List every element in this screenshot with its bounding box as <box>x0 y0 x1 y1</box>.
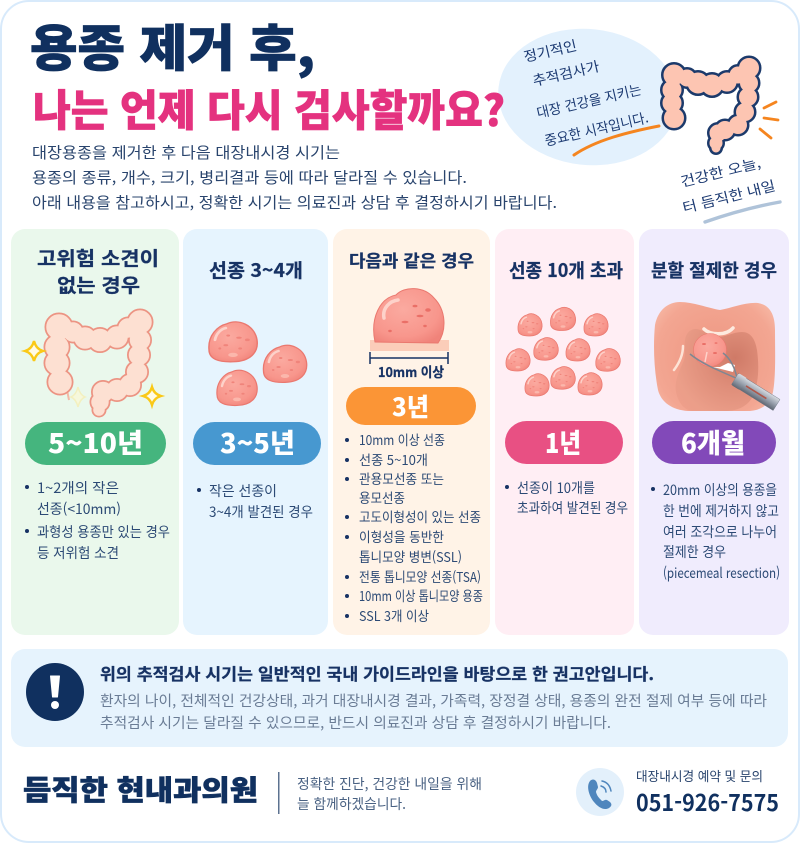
contact <box>636 766 779 818</box>
list: high risk features: 전통 톱니모양 선종(TSA) <box>359 566 481 586</box>
heading: piecemeal resection: 분할 절제한 경우 <box>651 257 777 283</box>
panel: more than 10 adenomas <box>495 229 634 635</box>
list: 3-4 adenomas: 작은 선종이 <box>209 481 277 501</box>
list: high risk features: 톱니모양 병변(SSL) <box>359 546 462 566</box>
clinic slogan: 늘 함께하겠습니다. <box>297 794 406 814</box>
list: high risk features: 10mm 이상 선종 <box>359 429 445 449</box>
list: low risk <box>25 478 170 563</box>
callout bubble: 중요한 시작입니다. <box>543 108 650 151</box>
icon: ten polyps <box>506 307 620 396</box>
list: 3-4 adenomas: 3~4개 발견된 경우 <box>209 502 313 522</box>
notice text: 환자의 나이, 전체적인 건강상태, 과거 대장내시경 결과, 가족력, 장정결 상태, 용종의 완전 절제 여부 등에 따라 <box>100 690 767 711</box>
clinic slogan: 정확한 진단, 건강한 내일을 위해 <box>297 774 482 794</box>
callout bubble: 추적검사가 <box>531 56 601 91</box>
list: piecemeal resection: 절제한 경우 <box>663 542 726 562</box>
handwritten note: 건강한 오늘, <box>678 153 763 192</box>
heading: low risk: 고위험 소견이 <box>37 244 159 271</box>
contact: 대장내시경 예약 및 문의 <box>636 766 763 785</box>
list: low risk: 1~2개의 작은 <box>37 478 119 498</box>
list: low risk: 등 저위험 소견 <box>37 543 119 563</box>
title <box>30 9 505 139</box>
list: high risk features: 고도이형성이 있는 선종 <box>359 506 481 526</box>
callout bubble: 대장 건강을 지키는 <box>535 79 643 123</box>
callout bubble: 정기적인 <box>522 35 579 67</box>
handwritten note: 터 듬직한 내일 <box>680 175 777 218</box>
contact: 051-926-7575 <box>636 784 779 818</box>
icon: large polyp with ruler <box>370 289 449 381</box>
notice text: 추적검사 시기는 달라질 수 있으므로, 반드시 의료진과 상담 후 결정하시기 바랍니다. <box>100 712 611 733</box>
list: high risk features: 선종 5~10개 <box>359 449 428 469</box>
intro text: 아래 내용을 참고하시고, 정확한 시기는 의료진과 상담 후 결정하시기 바랍니다. <box>32 191 557 213</box>
icon: endoscopic snare <box>654 302 780 411</box>
pill: 6 months <box>652 421 776 464</box>
panel: low risk <box>11 229 179 635</box>
notice text <box>100 690 767 733</box>
icon: colon header <box>663 58 778 152</box>
title: 용종 제거 후, <box>30 9 315 81</box>
pill: 5-10 years <box>25 422 166 465</box>
callout bubble <box>491 20 685 174</box>
heading: more than 10 adenomas: 선종 10개 초과 <box>509 256 623 283</box>
icon: phone <box>576 768 624 816</box>
intro text: 대장용종을 제거한 후 다음 대장내시경 시기는 <box>32 141 340 163</box>
pill: 3 years: 3년 <box>392 388 429 424</box>
list: piecemeal resection: 한 번에 제거하지 않고 <box>663 501 779 521</box>
panel: piecemeal resection <box>639 229 789 635</box>
list: more than 10 adenomas <box>505 478 628 518</box>
pill: 6 months: 6개월 <box>681 422 745 461</box>
list: high risk features: 관용모선종 또는 <box>359 468 444 488</box>
panel: high risk features <box>333 229 490 635</box>
intro text <box>32 141 557 213</box>
pill: 1 year: 1년 <box>545 422 581 461</box>
clinic slogan <box>278 772 482 814</box>
list: 3-4 adenomas <box>197 481 313 522</box>
icon: large polyp with ruler: 10mm 이상 <box>378 361 445 381</box>
heading: 3-4 adenomas: 선종 3~4개 <box>209 256 303 283</box>
list: low risk: 과형성 용종만 있는 경우 <box>37 522 170 542</box>
heading: low risk: 없는 경우 <box>57 271 140 298</box>
list: more than 10 adenomas: 초과하여 발견된 경우 <box>517 498 628 518</box>
list: high risk features <box>345 429 483 625</box>
pill: 1 year <box>505 421 623 464</box>
icon: colon <box>46 311 151 415</box>
clinic name: 듬직한 현내과의원 <box>23 769 258 809</box>
list: high risk features: 이형성을 동반한 <box>359 526 444 546</box>
list: piecemeal resection <box>651 480 780 583</box>
list: piecemeal resection: 20mm 이상의 용종을 <box>663 480 777 500</box>
pill: 3 years <box>346 387 476 425</box>
icon: sparkles <box>25 341 161 407</box>
handwritten note <box>678 153 780 222</box>
notice heading: 위의 추적검사 시기는 일반적인 국내 가이드라인을 바탕으로 한 권고안입니다. <box>100 661 654 685</box>
list: more than 10 adenomas: 선종이 10개를 <box>517 478 595 498</box>
list: low risk: 선종(<10mm) <box>37 499 121 519</box>
title: 나는 언제 다시 검사할까요? <box>33 77 505 139</box>
icon: three polyps <box>209 322 307 406</box>
heading: low risk <box>37 244 159 298</box>
list: high risk features: SSL 3개 이상 <box>359 605 429 625</box>
pill: 3-5 years: 3~5년 <box>220 422 295 461</box>
list: piecemeal resection: (piecemeal resection) <box>663 563 780 583</box>
pill: 5-10 years: 5~10년 <box>48 422 143 461</box>
panel: notice <box>11 649 788 747</box>
panel: 3-4 adenomas <box>183 229 328 635</box>
icon: exclamation <box>26 663 84 721</box>
list: high risk features: 10mm 이상 톱니모양 용종 <box>359 585 483 605</box>
list: high risk features: 용모선종 <box>359 487 405 507</box>
list: piecemeal resection: 여러 조각으로 나누어 <box>663 522 777 542</box>
pill: 3-5 years <box>193 422 321 465</box>
intro text: 용종의 종류, 개수, 크기, 병리결과 등에 따라 달라질 수 있습니다. <box>32 166 467 188</box>
heading: high risk features: 다음과 같은 경우 <box>349 247 474 272</box>
